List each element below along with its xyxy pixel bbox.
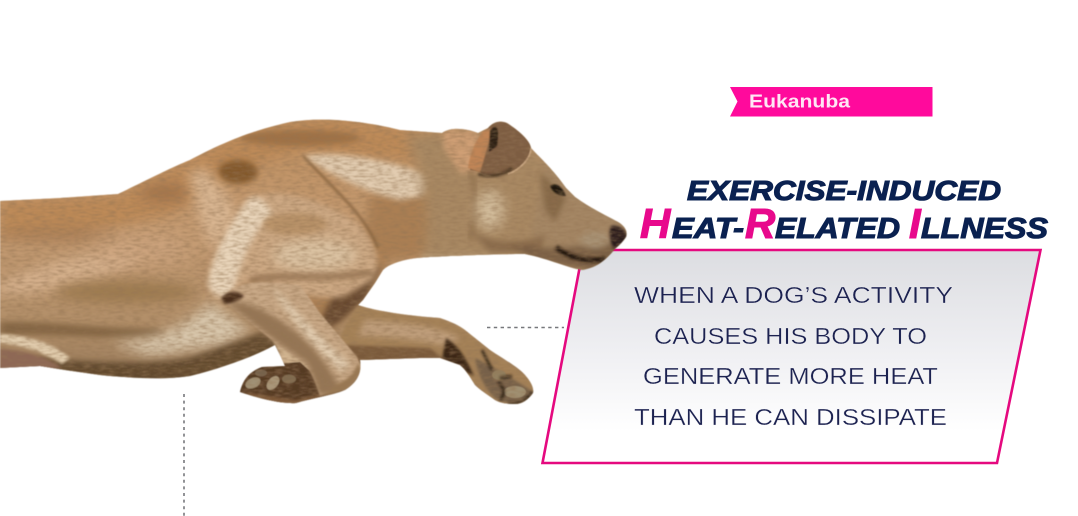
- light throat: [422, 254, 459, 258]
- title line 2: H: [640, 200, 672, 247]
- back tone: [0, 120, 430, 238]
- definition text: [634, 282, 953, 430]
- title line 2: ELATED: [775, 213, 900, 245]
- dotted connector: vertical: [183, 394, 185, 516]
- near front leg: [222, 282, 362, 408]
- definition text: WHEN A DOG’S ACTIVITY: [634, 282, 953, 308]
- brand name: Eukanuba: [749, 92, 851, 112]
- upper arm muscle: [211, 194, 377, 305]
- belly light fur: [110, 302, 250, 356]
- title line 2: LLNESS: [921, 213, 1049, 245]
- dotted connector: horizontal: [487, 326, 564, 328]
- neck crease: [470, 170, 475, 240]
- muzzle speckle: [580, 232, 610, 248]
- small far-leg stub behind near leg: [272, 341, 309, 370]
- cheek highlight: [476, 190, 504, 230]
- title line 2: [640, 200, 1049, 247]
- body base: [0, 119, 588, 404]
- elbow shadow: [221, 292, 244, 304]
- near leg shaft: [222, 282, 362, 396]
- title line 2: I: [909, 200, 922, 247]
- arm lower crease: [250, 272, 372, 280]
- near paw: [240, 362, 343, 404]
- upper shoulder blaze: [303, 154, 430, 200]
- light streak behind shoulder: [188, 168, 238, 250]
- definition text: GENERATE MORE HEAT: [643, 363, 938, 389]
- cheek shade: [475, 232, 544, 254]
- definition text: CAUSES HIS BODY TO: [654, 323, 927, 349]
- belly underside shadow: [7, 330, 280, 379]
- fur texture: [0, 115, 640, 410]
- shoulder bright highlight: [208, 197, 272, 297]
- title line 2: R: [745, 200, 776, 247]
- dog illustration: [0, 115, 640, 410]
- far front leg: [341, 306, 534, 405]
- neck crown: [442, 130, 480, 172]
- inner hind leg: [0, 348, 62, 369]
- dark patch on back: [218, 160, 258, 184]
- flank highlights: [0, 252, 134, 298]
- definition text: THAN HE CAN DISSIPATE: [634, 404, 947, 430]
- ear: [468, 122, 531, 176]
- mouth line: [556, 247, 605, 260]
- neck and chest: [310, 194, 430, 316]
- title: [640, 175, 1049, 247]
- brand tag: [730, 87, 932, 116]
- shoulder crease: [303, 156, 378, 248]
- head: [408, 121, 628, 270]
- lower jaw shade: [517, 240, 618, 270]
- flank shadow: [55, 281, 195, 303]
- definition panel: [542, 250, 1040, 463]
- eye: [550, 184, 566, 196]
- title line 2: EAT-: [672, 213, 744, 245]
- title line 1: EXERCISE-INDUCED: [687, 175, 1001, 206]
- nose: [610, 226, 627, 248]
- forehead shade: [540, 172, 566, 222]
